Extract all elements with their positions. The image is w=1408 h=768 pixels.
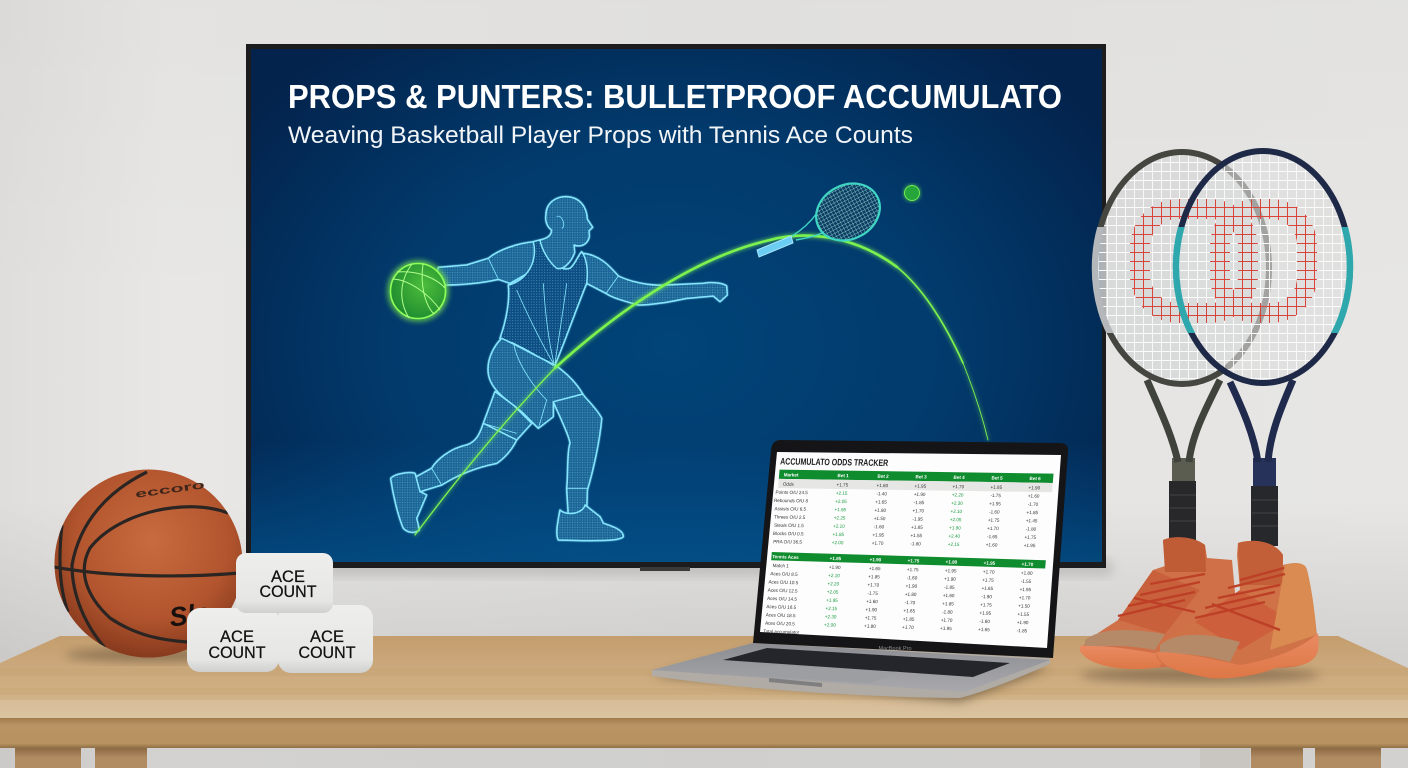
spreadsheet lower section	[763, 552, 1046, 642]
spreadsheet data block one: +1.95	[1024, 543, 1036, 548]
spreadsheet data block two: +2.10	[828, 573, 840, 578]
spreadsheet data block one: -1.80	[910, 541, 921, 546]
spreadsheet data block one: -1.85	[914, 500, 925, 505]
spreadsheet data block two: +1.95	[826, 598, 838, 603]
spreadsheet data block two: Aces O/U 10.5	[768, 579, 799, 585]
spreadsheet header two: +1.85	[829, 556, 842, 561]
spreadsheet data block one: +2.25	[834, 515, 846, 521]
spreadsheet data block one: +1.50	[874, 516, 886, 521]
spreadsheet data block one: -1.95	[912, 516, 923, 522]
spreadsheet data block two: +1.75	[980, 602, 992, 608]
spreadsheet data block one: +1.85	[1026, 510, 1039, 515]
spreadsheet header two: +1.90	[869, 557, 882, 562]
orange sneakers	[1080, 537, 1320, 683]
spreadsheet data block two: +1.85	[942, 601, 954, 606]
wristband left	[187, 608, 279, 672]
spreadsheet data block one: -1.70	[1028, 502, 1039, 507]
spreadsheet data block two: +1.70	[983, 569, 995, 575]
spreadsheet data block one: +1.80	[876, 483, 889, 488]
spreadsheet data block two: +1.85	[903, 616, 915, 622]
spreadsheet data block one: +2.05	[835, 499, 847, 504]
spreadsheet data block two: +1.60	[866, 599, 878, 604]
spreadsheet data block two: +2.00	[824, 622, 836, 628]
spreadsheet data block two: +1.90	[829, 565, 841, 570]
basketball brand logo: Sla	[167, 597, 212, 633]
spreadsheet data block one: Odds	[783, 482, 795, 487]
spreadsheet data block two: +1.90	[1017, 620, 1029, 625]
spreadsheet header two: +1.80	[945, 559, 958, 565]
right sneaker	[1156, 541, 1319, 678]
spreadsheet data block one: +1.55	[989, 501, 1001, 506]
spreadsheet data block one: +1.80	[874, 508, 887, 513]
spreadsheet data block one: PRA O/U 36.5	[773, 539, 803, 545]
spreadsheet data block two: +1.75	[907, 567, 919, 572]
spreadsheet data block two: +1.50	[1018, 603, 1030, 609]
spreadsheet header one: Bet 6	[1029, 476, 1041, 481]
spreadsheet header one: Bet 3	[915, 474, 927, 479]
spreadsheet data block two: -1.85	[944, 585, 955, 590]
wristband top	[236, 553, 333, 613]
spreadsheet data block one: Steals O/U 1.5	[774, 523, 804, 528]
green tennis ball	[904, 186, 920, 200]
spreadsheet data block two: Aces O/U 14.5	[767, 596, 798, 602]
spreadsheet data block two: +2.05	[827, 589, 839, 595]
laptop trackpad	[740, 665, 900, 683]
spreadsheet data block one: +1.75	[988, 518, 1000, 523]
spreadsheet data block two: Match 1	[772, 563, 789, 569]
spreadsheet data block two: -1.90	[981, 594, 993, 599]
wall-mounted TV	[246, 44, 1112, 576]
spreadsheet data block two: -1.55	[1021, 579, 1032, 584]
spreadsheet data block one: +1.90	[949, 525, 961, 531]
right tennis racket	[1140, 151, 1350, 546]
wristband top: ACE	[271, 568, 305, 586]
spreadsheet data block one: +1.90	[1028, 485, 1041, 490]
left tennis racket	[1095, 152, 1269, 541]
spreadsheet data block two: +1.70	[902, 625, 914, 630]
spreadsheet data block two: Aces O/U 20.5	[765, 621, 795, 627]
glowing green basketball	[390, 264, 446, 318]
spreadsheet data block one: +1.75	[836, 482, 849, 488]
spreadsheet data block one: -1.80	[1026, 526, 1037, 532]
spreadsheet data block one: +1.85	[990, 485, 1003, 490]
green trajectory curve	[415, 236, 988, 535]
spreadsheet header one: Bet 5	[991, 475, 1003, 481]
spreadsheet data block one: +1.70	[912, 508, 925, 513]
left sneaker	[1080, 537, 1238, 669]
spreadsheet data block two: Total accumulator	[763, 629, 800, 635]
spreadsheet data block two: +1.90	[865, 607, 878, 612]
wristband right: ACE	[310, 628, 344, 646]
spreadsheet data block two: +1.95	[1019, 587, 1032, 592]
spreadsheet data block one: +1.70	[952, 484, 965, 489]
spreadsheet header two: +1.95	[983, 560, 996, 566]
spreadsheet data block one: Blocks O/U 0.5	[773, 531, 804, 536]
spreadsheet header two: Tennis Aces	[772, 554, 799, 560]
spreadsheet data block two: -1.75	[867, 591, 879, 596]
ACE COUNT wristbands	[187, 553, 373, 673]
spreadsheet data block two: +1.70	[867, 582, 880, 588]
spreadsheet data block one: -1.60	[874, 524, 885, 529]
spreadsheet title: ACCUMULATO ODDS TRACKER	[780, 456, 889, 468]
spreadsheet data block one: +1.95	[872, 532, 885, 538]
spreadsheet data block two: Aces O/U 12.5	[768, 588, 798, 594]
spreadsheet data block two: +1.90	[944, 576, 956, 582]
spreadsheet data block one: -1.40	[876, 491, 888, 496]
spreadsheet data block two: +1.60	[943, 593, 955, 598]
spreadsheet data block two	[763, 563, 1033, 642]
wristband top: COUNT	[260, 583, 316, 601]
spreadsheet data block two: +1.95	[945, 568, 957, 574]
spreadsheet data block one: +2.15	[836, 491, 848, 496]
spreadsheet data block one: +1.95	[914, 484, 927, 489]
wristband left: COUNT	[208, 644, 266, 662]
title: PROPS & PUNTERS: BULLETPROOF ACCUMULATO	[288, 78, 1062, 115]
spreadsheet data block one: +2.30	[951, 501, 963, 506]
spreadsheet data block one: +2.15	[948, 542, 960, 547]
spreadsheet data block one: +1.55	[910, 533, 923, 538]
spreadsheet data block one: Rebounds O/U 8	[774, 498, 809, 503]
spreadsheet data block two: +1.75	[865, 615, 877, 621]
spreadsheet data block one: +1.85	[832, 532, 845, 537]
spreadsheet data block one	[770, 479, 1053, 548]
spreadsheet data block one: +2.10	[833, 524, 845, 529]
spreadsheet data block two: +1.65	[903, 608, 916, 614]
spreadsheet data block two: -1.70	[905, 600, 916, 605]
wristband right	[278, 605, 373, 673]
wristband left: ACE	[220, 628, 254, 646]
spreadsheet data block two: +1.65	[981, 586, 994, 591]
spreadsheet data block one: Threes O/U 2.5	[774, 514, 806, 520]
spreadsheet data block one: +1.90	[914, 492, 926, 497]
spreadsheet data block two: +1.80	[864, 624, 876, 629]
spreadsheet data block one: +1.95	[834, 507, 847, 512]
spreadsheet data block two: +1.95	[979, 610, 992, 616]
spreadsheet header two: +1.70	[1021, 562, 1034, 567]
spreadsheet header one: Market	[784, 472, 799, 478]
spreadsheet data block two: +1.75	[982, 577, 994, 583]
spreadsheet data block two: Aces O/U 8.5	[770, 571, 798, 577]
spreadsheet data block two: +1.70	[1019, 595, 1031, 601]
spreadsheet data block one: -1.65	[987, 534, 998, 539]
spreadsheet header two	[771, 552, 1046, 568]
spreadsheet data block two: +2.20	[827, 581, 840, 587]
laptop lid	[753, 440, 1068, 658]
spreadsheet data block one: +1.85	[911, 525, 923, 530]
spreadsheet data block two: +1.55	[1017, 612, 1030, 617]
laptop keyboard	[723, 648, 1010, 677]
spreadsheet data block one: -1.75	[990, 493, 1002, 498]
red racket string logo	[1140, 209, 1307, 313]
spreadsheet data block one: +1.60	[986, 542, 998, 548]
wireframe basketball player	[391, 197, 727, 541]
wooden table	[0, 636, 1408, 768]
wristband right: COUNT	[298, 644, 356, 662]
spreadsheet header two: +1.75	[907, 558, 920, 564]
spreadsheet header one: Bet 2	[877, 474, 889, 479]
spreadsheet data block one: +2.05	[950, 517, 962, 522]
spreadsheet data block two: +1.80	[905, 592, 917, 597]
spreadsheet data block two: -1.60	[979, 619, 990, 624]
spreadsheet data block one: +1.60	[1028, 493, 1040, 499]
spreadsheet data block two: -1.80	[942, 609, 953, 615]
spreadsheet data block two: +1.65	[869, 566, 881, 571]
spreadsheet data block one: +1.70	[872, 541, 884, 546]
spreadsheet data block two: +1.80	[1021, 570, 1033, 576]
spreadsheet data block one: +2.20	[952, 492, 964, 498]
spreadsheet data block two: +2.15	[825, 606, 838, 611]
spreadsheet header one	[779, 470, 1054, 483]
spreadsheet upper section	[770, 456, 1055, 548]
spreadsheet data block two: +1.95	[940, 626, 952, 631]
spreadsheet header one: Bet 1	[837, 473, 849, 478]
spreadsheet data block one: +1.45	[1026, 518, 1038, 523]
spreadsheet data block two: +1.70	[941, 618, 953, 623]
laptop spreadsheet screen	[760, 452, 1061, 648]
spreadsheet data block one: +2.40	[948, 534, 961, 539]
spreadsheet data block one: +1.70	[987, 526, 999, 531]
spreadsheet data block one: Assists O/U 6.5	[774, 506, 807, 512]
spreadsheet data block one: +2.00	[832, 540, 844, 545]
spreadsheet data block one: +1.75	[1024, 535, 1037, 540]
spreadsheet data block one: +2.10	[950, 509, 963, 514]
spreadsheet data block one: -1.60	[989, 509, 1000, 515]
laptop brand label: MacBook Pro	[878, 646, 912, 652]
spreadsheet header one: Bet 4	[953, 475, 965, 480]
spreadsheet data block one: Points O/U 24.5	[775, 490, 808, 495]
basketball top logo: eccoro	[135, 479, 206, 501]
spreadsheet data block two: +1.85	[868, 574, 880, 579]
spreadsheet data block two: -1.85	[1017, 628, 1028, 633]
laptop	[652, 440, 1068, 702]
wireframe tennis racket	[757, 173, 890, 257]
spreadsheet data block two: +1.90	[905, 583, 918, 589]
spreadsheet data block two: Aces O/U 18.5	[766, 612, 796, 618]
laptop base	[652, 643, 1050, 702]
spreadsheet data block one: +1.65	[875, 499, 887, 505]
spreadsheet data block two: Aces O/U 16.5	[766, 604, 797, 610]
real basketball	[54, 470, 245, 662]
spreadsheet data block two: +1.65	[978, 627, 990, 632]
spreadsheet data block two: -1.60	[907, 575, 918, 581]
spreadsheet data block two: +2.30	[825, 614, 837, 619]
subtitle: Weaving Basketball Player Props with Tennis Ace Counts	[288, 122, 913, 149]
